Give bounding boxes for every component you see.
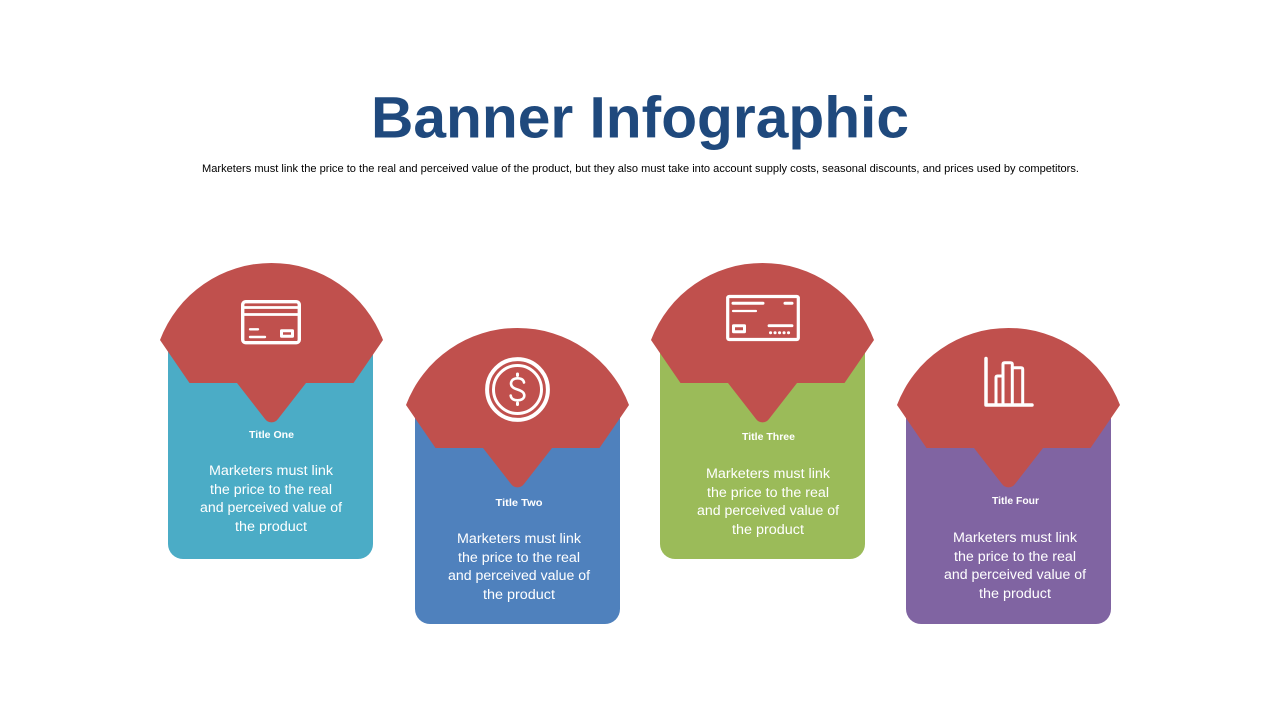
text block two: the product (483, 587, 555, 602)
panel: title one (160, 263, 383, 559)
heading: title two: Title Two (496, 497, 542, 509)
text block four: Marketers must link (953, 530, 1077, 545)
text block four (944, 530, 1086, 601)
text block three: the price to the real (707, 485, 829, 500)
card three background (660, 340, 865, 559)
card one background (168, 340, 373, 559)
heading: title three: Title Three (742, 431, 795, 443)
banner four shape (897, 328, 1120, 487)
banner two shape (406, 328, 629, 487)
text block one: the product (235, 519, 307, 534)
heading: title four: Title Four (992, 495, 1039, 507)
text block two: the price to the real (458, 550, 580, 565)
banner three shape (651, 263, 874, 422)
icon: bar chart (986, 358, 1032, 405)
card four background (906, 405, 1111, 624)
text block two: Marketers must link (457, 531, 581, 546)
subtitle: Marketers must link the price to the real and perceived value of the product, but they also must take into account supply costs, seasonal discounts, and prices used by competitors. (202, 163, 1079, 175)
text block one: and perceived value of (200, 500, 342, 515)
text block three: Marketers must link (706, 466, 830, 481)
text block one: Marketers must link (209, 463, 333, 478)
panel: title two (406, 328, 629, 624)
text block two: and perceived value of (448, 568, 590, 583)
text block four: and perceived value of (944, 567, 1086, 582)
text block three (697, 466, 839, 537)
text block three: and perceived value of (697, 503, 839, 518)
icon: dollar coin (487, 359, 548, 420)
text block four: the price to the real (954, 549, 1076, 564)
text block two (448, 531, 590, 602)
text block three: the product (732, 522, 804, 537)
card two background (415, 405, 620, 624)
icon: credit card (243, 302, 299, 343)
banner one shape (160, 263, 383, 422)
icon: bank cheque (728, 296, 798, 340)
heading: title one: Title One (249, 429, 294, 441)
title: Banner Infographic (371, 86, 909, 150)
text block four: the product (979, 586, 1051, 601)
text block one (200, 463, 342, 534)
panel: title three (651, 263, 874, 559)
panel: title four (897, 328, 1120, 624)
text block one: the price to the real (210, 482, 332, 497)
